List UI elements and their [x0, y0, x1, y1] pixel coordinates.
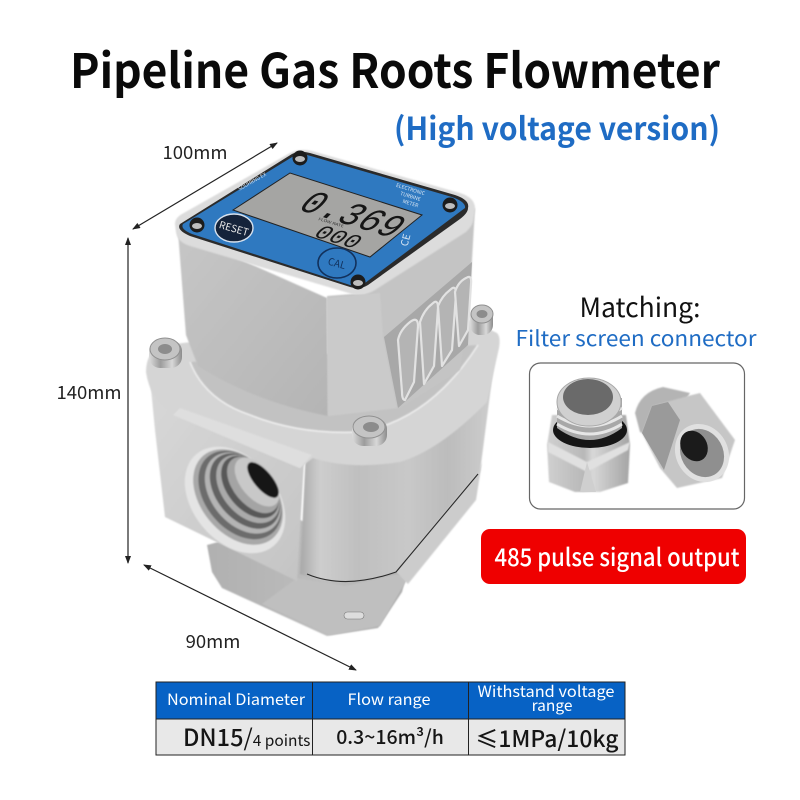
blue panel	[179, 152, 468, 288]
upper body right face	[327, 208, 475, 416]
threaded port	[164, 427, 306, 573]
connector right	[635, 387, 740, 492]
dimension: 90mm	[144, 565, 356, 670]
subtitle: (High voltage version)	[394, 104, 720, 150]
panel small labels: SOUHRNG EX	[237, 171, 268, 193]
table row: ≤1MPa/10kg	[476, 720, 618, 754]
dimension: 100mm: 100mm	[162, 139, 228, 165]
connector label: Filter screen connector	[516, 322, 757, 353]
flange ring curve	[190, 345, 478, 432]
LCD digits: 000	[306, 223, 368, 254]
table header: Withstand voltage	[478, 680, 614, 702]
panel small labels: ELECTRONIC	[395, 182, 426, 197]
top bezel	[175, 150, 475, 294]
dimension: 140mm: 140mm	[56, 379, 122, 405]
panel small labels	[237, 171, 426, 248]
flowmeter device	[146, 150, 500, 636]
table header: Flow range	[348, 688, 430, 710]
flange	[146, 320, 500, 468]
cal button	[318, 248, 356, 278]
LCD screen	[233, 173, 422, 257]
cal button: CAL	[326, 253, 348, 272]
table header: range	[532, 694, 572, 716]
panel screws	[190, 150, 458, 290]
seam line	[307, 474, 478, 582]
table row: DN15/4 points	[183, 719, 310, 753]
dimension: 90mm: 90mm	[186, 628, 240, 654]
table header: Nominal Diameter	[167, 688, 306, 710]
reset button: RESET	[218, 216, 251, 239]
LCD digits: FLOW RATE	[317, 217, 345, 229]
upper body left face	[178, 232, 328, 416]
flange bolts	[149, 305, 493, 619]
bottom base	[207, 520, 410, 636]
connector photo panel	[530, 363, 744, 509]
dimension: 100mm	[133, 139, 277, 229]
table header	[156, 680, 625, 719]
flange ledge strip	[173, 408, 312, 468]
panel small labels: TURBINE	[399, 190, 422, 203]
table row	[156, 719, 625, 755]
panel small labels: CE	[396, 232, 414, 248]
speckled corner	[327, 293, 397, 416]
port face	[150, 378, 304, 581]
red badge: 485 pulse signal output	[481, 529, 746, 584]
spec table	[156, 680, 625, 755]
right side face	[300, 340, 497, 582]
matching heading: Matching:	[580, 286, 700, 325]
lower right chamfer	[396, 462, 482, 584]
cooling fins	[384, 262, 472, 408]
title: Pipeline Gas Roots Flowmeter	[70, 33, 720, 102]
table row: 0.3~16m³/h	[336, 721, 444, 750]
connector left	[547, 378, 630, 492]
red badge: 485 pulse signal output: 485 pulse signal output	[494, 539, 740, 574]
LCD digits: 0.369	[288, 186, 415, 246]
panel small labels: METER	[402, 198, 420, 210]
